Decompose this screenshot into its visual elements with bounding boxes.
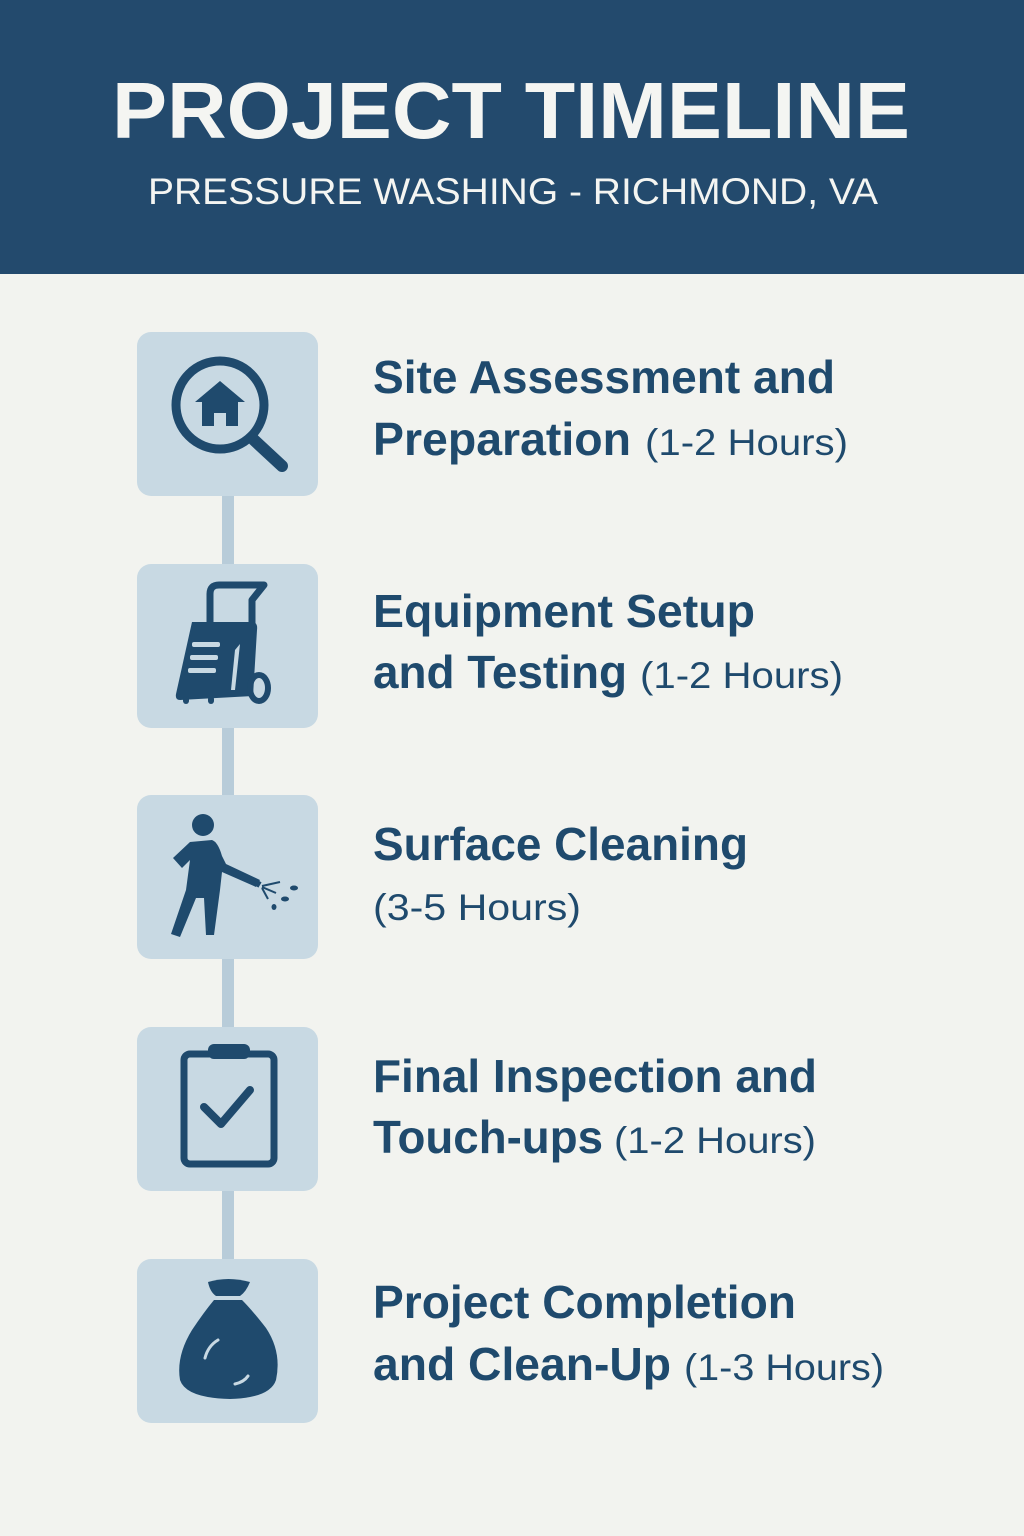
step 3 text: (3-5 Hours) — [373, 887, 581, 928]
subtitle: PRESSURE WASHING - RICHMOND, VA — [148, 171, 878, 212]
step 5 text: and Clean-Up — [373, 1338, 671, 1390]
step 4 text: (1-2 Hours) — [614, 1120, 816, 1161]
step 2: equipment setup — [137, 564, 843, 728]
step 1 text: Site Assessment and — [373, 351, 835, 403]
step 5 text: (1-3 Hours) — [684, 1347, 884, 1388]
step 3: surface cleaning — [137, 795, 748, 959]
title: PROJECT TIMELINE — [112, 66, 910, 155]
header banner — [0, 0, 1024, 274]
icon: trash bag — [137, 1259, 318, 1423]
icon: clipboard check — [137, 1027, 318, 1191]
step 1: site assessment — [137, 332, 848, 496]
timeline connector — [222, 490, 234, 1270]
step 1 text: (1-2 Hours) — [645, 422, 848, 463]
step 5 text: Project Completion — [373, 1276, 796, 1328]
step 1 text: Preparation — [373, 413, 631, 465]
icon: pressure washer — [137, 564, 318, 728]
step 3 text: Surface Cleaning — [373, 818, 748, 870]
step 2 text: Equipment Setup — [373, 585, 755, 637]
step 4 text: Final Inspection and — [373, 1050, 817, 1102]
step 4 text: Touch-ups — [373, 1111, 603, 1163]
icon: person spraying — [137, 795, 318, 959]
icon: magnifier with house — [137, 332, 318, 496]
step 2 text: (1-2 Hours) — [640, 655, 843, 696]
step 5: project completion — [137, 1259, 884, 1423]
step 2 text: and Testing — [373, 646, 627, 698]
step 4: final inspection — [137, 1027, 817, 1191]
